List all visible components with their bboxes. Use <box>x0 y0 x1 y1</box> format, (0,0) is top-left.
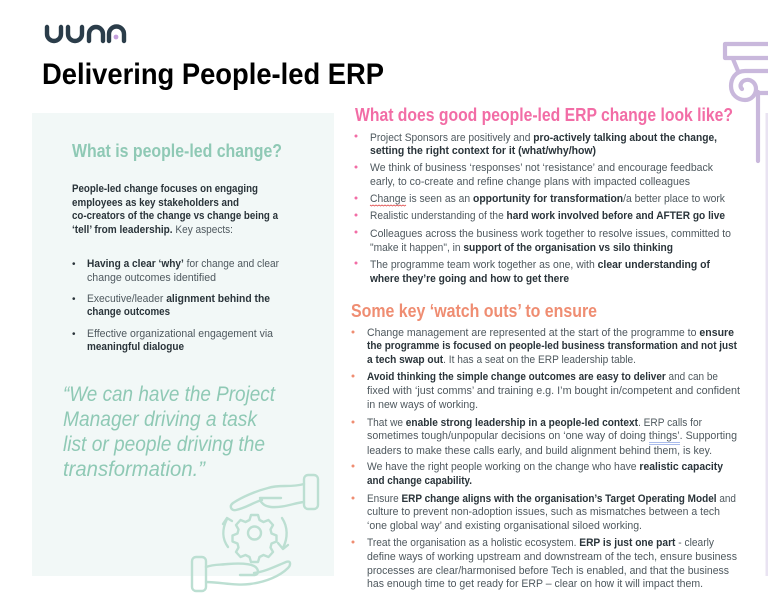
pillar shaft: light lavender edge <box>766 113 768 576</box>
quote: list or people driving the <box>63 433 265 456</box>
list: good change bullets: setting the right context for it (what/why/how) <box>370 145 596 157</box>
logo: UUNA <box>47 27 124 41</box>
text block: definition: employees as key stakeholders and <box>72 197 239 209</box>
list: watch outs bullets: ‘one global way’ and existing organisational siloed working. <box>367 520 642 532</box>
text block: definition: ‘tell’ from leadership. Key aspects: <box>72 224 233 236</box>
list: good change bullets <box>354 132 731 285</box>
list: key aspects <box>72 258 279 353</box>
list: watch outs bullets: the programme is focused on people-led business transformation and not just <box>367 340 737 352</box>
list: good change bullets: Project Sponsors are positively and pro-actively talking about the change, <box>370 132 717 144</box>
list: watch outs bullets: culture to prevent non-adoption issues, such as mismatches between a tech <box>367 506 720 518</box>
text block: definition: co-creators of the change vs change being a <box>72 210 279 222</box>
list: good change bullets: early, to co-create and refine change plans with impacted colleagues <box>370 176 691 188</box>
list: watch outs bullets: a tech swap out. It has a seat on the ERP leadership table. <box>367 354 636 366</box>
list: good change bullets: Change is seen as an opportunity for transformation/a better place to work <box>370 193 726 205</box>
quote: transformation.” <box>63 458 206 481</box>
text block: definition <box>72 183 279 236</box>
section: watch outs <box>351 300 740 590</box>
list: watch outs bullets: Treat the organisation as a holistic ecosystem. ERP is just one part - clearly <box>367 537 715 549</box>
list: watch outs bullets: and change capability. <box>367 475 472 487</box>
list: good change bullets: Colleagues across the business work together to resolve issues, committed to <box>370 228 731 240</box>
list: watch outs bullets: in new ways of working. <box>367 399 478 411</box>
list: key aspects: change outcomes identified <box>87 272 216 284</box>
text block: definition: People-led change focuses on engaging <box>72 183 258 195</box>
list: watch outs bullets: Change management are represented at the start of the programme to ensure <box>367 327 734 339</box>
heading: what is people-led change: What is people-led change? <box>72 141 282 161</box>
list: watch outs bullets: define ways of working upstream and downstream of the tech, ensure business <box>367 551 738 563</box>
list: watch outs bullets: fixed with ‘just comms’ and training e.g. I’m bought in/competent and confident <box>367 385 740 397</box>
list: good change bullets: "make it happen", in support of the organisation vs silo thinking <box>370 242 673 254</box>
panel: what is people-led change <box>32 113 334 576</box>
list: key aspects: change outcomes <box>87 306 170 318</box>
list: watch outs bullets: That we enable strong leadership in a people-led context. ERP calls for <box>367 417 702 429</box>
title: Delivering People-led ERP <box>42 58 384 91</box>
icon: hands with gear <box>192 475 318 591</box>
quote: “We can have the Project <box>63 383 276 406</box>
list: watch outs bullets: We have the right people working on the change who have realistic capacity <box>367 461 723 473</box>
section: what does good look like <box>354 104 733 285</box>
quote <box>63 383 276 481</box>
list: watch outs bullets: leaders to make these calls early, and build alignment behind them, is key. <box>367 445 712 457</box>
list: watch outs bullets: sometimes tough/unpopular decisions on ‘one way of doing things’. Supporting <box>367 430 737 442</box>
list: watch outs bullets <box>352 327 740 590</box>
list: key aspects: • <box>72 294 76 305</box>
heading: watch outs: Some key ‘watch outs’ to ensure <box>351 300 597 321</box>
list: key aspects: • <box>72 329 76 340</box>
list: good change bullets: The programme team work together as one, with clear understanding of <box>370 259 710 271</box>
list: good change bullets: Realistic understanding of the hard work involved before and AFTER go live <box>370 210 725 222</box>
list: key aspects: • <box>72 259 76 270</box>
list: key aspects: Effective organizational engagement via <box>87 328 273 340</box>
list: key aspects: meaningful dialogue <box>87 341 184 353</box>
list: watch outs bullets: Ensure ERP change aligns with the organisation’s Target Operating Model and <box>367 493 736 505</box>
list: good change bullets: where they’re going and how to get there <box>369 273 569 285</box>
quote: Manager driving a task <box>63 408 258 431</box>
list: good change bullets: We think of business ‘responses’ not ‘resistance’ and encourage feedback <box>370 162 714 174</box>
list: key aspects: Having a clear ‘why’ for change and clear <box>87 258 279 270</box>
icon: pillar <box>725 44 768 161</box>
list: key aspects: Executive/leader alignment behind the <box>87 293 270 305</box>
list: watch outs bullets: Avoid thinking the simple change outcomes are easy to deliver and can be <box>367 371 718 383</box>
list: watch outs bullets: processes are clear/harmonised before Tech is enabled, and that the business <box>367 565 730 577</box>
list: watch outs bullets: has enough time to get ready for ERP – clear on how it will impact them. <box>367 578 703 590</box>
